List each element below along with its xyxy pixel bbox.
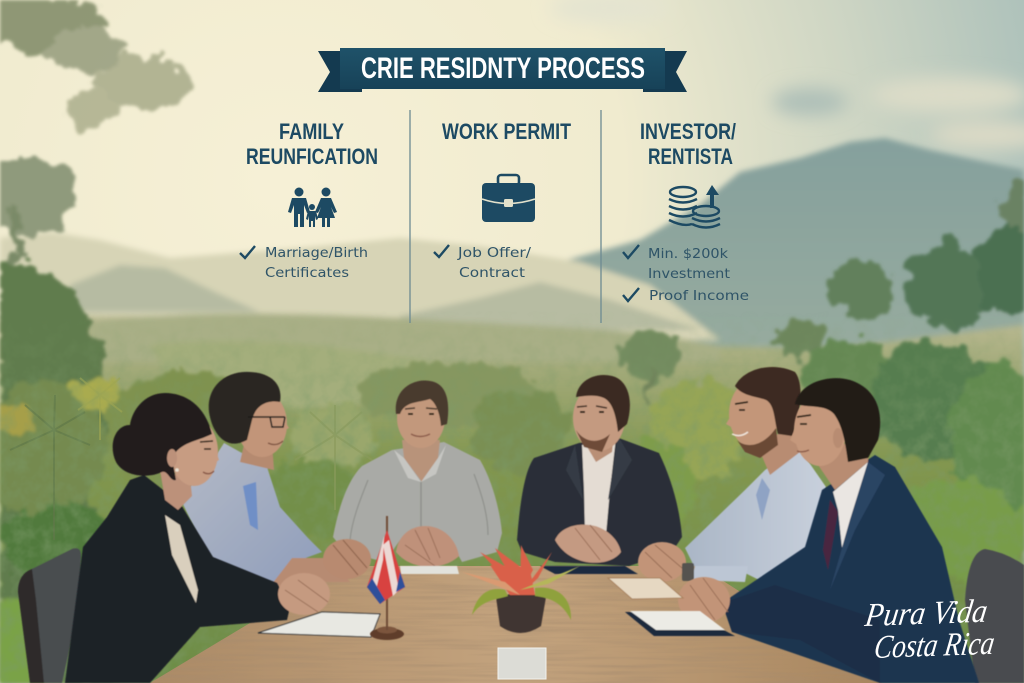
checklist item: certificates: Certificates [265, 265, 349, 281]
checklist item: job offer: Contract [459, 265, 525, 281]
signature: pura vida costa rica [862, 593, 997, 666]
background: jungle foliage [0, 157, 1024, 683]
checklist item: certificates: Marriage/Birth [265, 245, 368, 261]
background: top left tree canopy [0, 0, 188, 130]
panel: work permit [434, 119, 571, 281]
heading: family reunification: FAMILY [279, 119, 344, 144]
panel: family reunification [240, 119, 378, 281]
checklist item: proof income: Proof Income [649, 288, 749, 304]
checklist item: investment: Investment [648, 266, 730, 282]
person: man in grey shirt, centre left [333, 380, 502, 574]
checklist item: certificates [240, 245, 368, 281]
icon: family [288, 188, 337, 227]
person: man in navy suit [678, 378, 979, 683]
person: man with glasses [180, 372, 371, 590]
person: man in dark suit, centre right [517, 375, 682, 574]
title text: CRIE RESIDNTY PROCESS [361, 52, 645, 85]
place card [498, 648, 546, 679]
centerpiece plant [462, 545, 580, 633]
right chair [965, 549, 1024, 683]
background: mountains and valley [0, 138, 1024, 683]
background: palm trees [10, 378, 372, 540]
icon: coins and arrow [669, 185, 720, 228]
icon: briefcase [482, 175, 535, 222]
person: woman in black blazer [65, 393, 330, 683]
desk flag: Costa Rica [367, 516, 405, 640]
checklist item: investment: Min. $200k [648, 246, 728, 262]
documents on the table [258, 578, 735, 637]
checklist item: job offer [434, 245, 532, 281]
signature: pura vida costa rica: Costa Rica [872, 625, 997, 666]
panel: investor / rentista [623, 119, 749, 304]
heading: investor rentista: RENTISTA [648, 144, 733, 169]
banner: title ribbon [318, 48, 687, 92]
checklist item: job offer: Job Offer/ [457, 245, 532, 261]
signature: pura vida costa rica: Pura Vida [862, 593, 990, 634]
checklist item: investment [623, 245, 730, 282]
background: foliage texture [0, 362, 1024, 683]
heading: investor rentista: INVESTOR/ [640, 119, 736, 144]
conference table [150, 566, 882, 683]
left chair [18, 548, 81, 683]
heading: work permit: WORK PERMIT [442, 119, 571, 144]
person: man in light blue shirt [638, 367, 826, 600]
heading: family reunification: REUNFICATION [246, 144, 378, 169]
divider lines [410, 110, 601, 323]
